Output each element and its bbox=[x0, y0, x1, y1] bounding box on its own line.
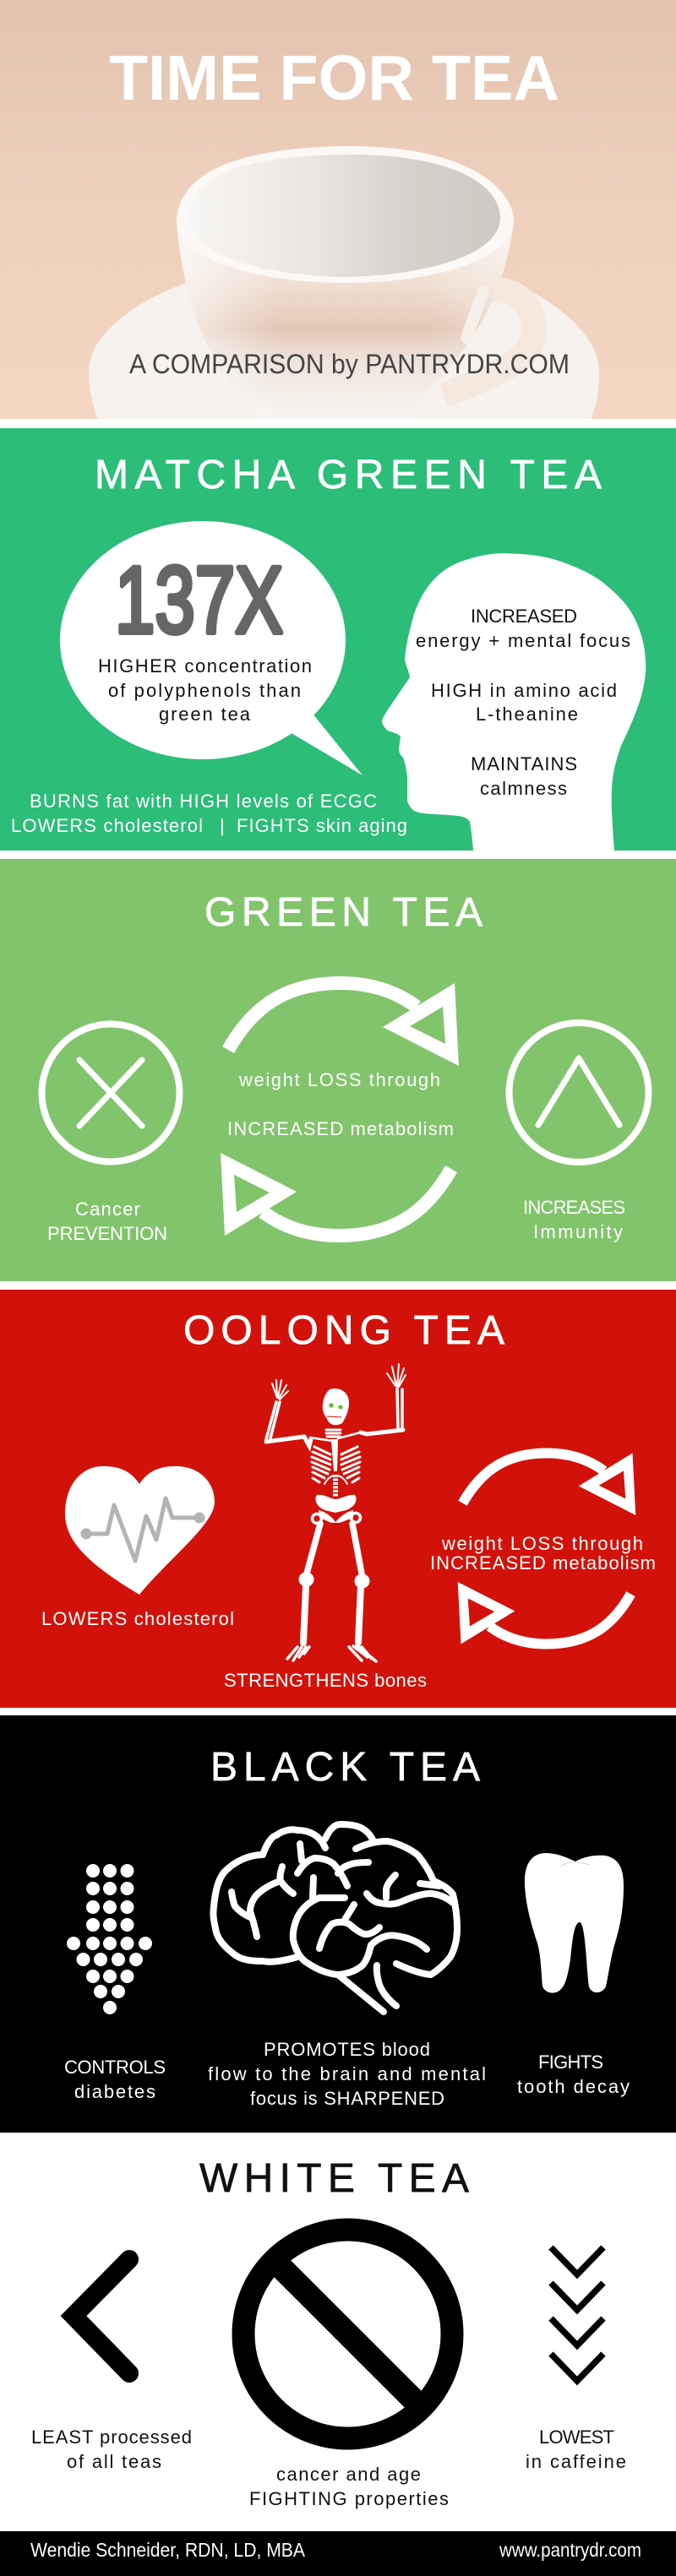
text: head benefits: L-theanine bbox=[476, 704, 578, 725]
text: head benefits: HIGH in amino acid bbox=[431, 680, 617, 701]
icon: brain bbox=[213, 1824, 457, 2012]
arrow: cycle top small bbox=[463, 1453, 635, 1515]
text: weight loss bbox=[227, 1069, 454, 1139]
subtitle: A COMPARISON by PANTRYDR.COM bbox=[129, 349, 570, 379]
text: increases immunity: Immunity bbox=[533, 1221, 623, 1242]
text: weight loss: weight LOSS through bbox=[238, 1069, 440, 1090]
text: matcha benefits bbox=[11, 791, 407, 836]
heading: oolong tea: OOLONG TEA bbox=[183, 1308, 504, 1353]
text: fights tooth decay: FIGHTS bbox=[538, 2052, 603, 2073]
text: author credit: Wendie Schneider, RDN, LD, MBA bbox=[30, 2539, 306, 2561]
text: promotes blood flow: focus is SHARPENED bbox=[250, 2088, 444, 2109]
text: head benefits: INCREASED bbox=[471, 606, 577, 627]
icon: tooth bbox=[525, 1853, 624, 1993]
text: strengthens bones: STRENGTHENS bones bbox=[224, 1670, 427, 1691]
icon: four down chevrons bbox=[551, 2247, 603, 2381]
text: cancer prevention bbox=[47, 1198, 167, 1244]
icon: caret in circle bbox=[509, 1023, 649, 1162]
text: promotes blood flow: PROMOTES blood bbox=[264, 2039, 430, 2060]
heading: white tea: WHITE TEA bbox=[199, 2156, 469, 2201]
icon: teacup on saucer bbox=[89, 146, 599, 422]
text: lowers cholesterol: LOWERS cholesterol bbox=[41, 1608, 234, 1629]
text: fighting properties: FIGHTING properties bbox=[249, 2488, 449, 2509]
text: cancer prevention: PREVENTION bbox=[47, 1223, 167, 1244]
text: controls diabetes bbox=[64, 2057, 166, 2102]
text: fighting properties bbox=[249, 2464, 449, 2509]
panel: oolong tea bbox=[0, 1290, 676, 1708]
text: matcha benefits: FIGHTS skin aging bbox=[237, 815, 407, 836]
text: least processed: LEAST processed bbox=[31, 2427, 192, 2448]
text: lowest caffeine: LOWEST bbox=[539, 2427, 614, 2448]
text: increases immunity: INCREASES bbox=[523, 1197, 625, 1218]
text: head benefits: MAINTAINS bbox=[471, 753, 577, 774]
panel: green tea bbox=[0, 859, 676, 1281]
icon: left chevron bbox=[74, 2259, 129, 2373]
text: lowest caffeine bbox=[526, 2427, 626, 2472]
speech bubble bbox=[60, 521, 363, 775]
text: fighting properties: cancer and age bbox=[276, 2464, 421, 2485]
text: fights tooth decay bbox=[517, 2052, 630, 2097]
text: cancer prevention: Cancer bbox=[75, 1198, 140, 1220]
text: least processed bbox=[31, 2427, 192, 2472]
panel: white tea bbox=[0, 2133, 676, 2531]
text: lowest caffeine: in caffeine bbox=[526, 2451, 626, 2472]
stat: 137X: 137X bbox=[115, 547, 283, 653]
title: TIME FOR TEA bbox=[109, 42, 559, 113]
text: weight loss: INCREASED metabolism bbox=[227, 1118, 454, 1139]
text: matcha benefits: BURNS fat with HIGH levels of ECGC bbox=[30, 791, 377, 812]
icon: dotted down arrow bbox=[67, 1864, 152, 2014]
text: promotes blood flow: flow to the brain and mental bbox=[208, 2063, 486, 2084]
text: weight loss: weight LOSS through bbox=[441, 1533, 643, 1554]
panel: footer bbox=[0, 2531, 676, 2576]
heading: black tea: BLACK TEA bbox=[210, 1745, 480, 1790]
text: controls diabetes: diabetes bbox=[74, 2081, 155, 2102]
text: least processed: of all teas bbox=[67, 2451, 161, 2472]
text: fights tooth decay: tooth decay bbox=[517, 2076, 630, 2097]
icon: head silhouette bbox=[382, 553, 646, 851]
text: polyphenols: HIGHER concentration bbox=[98, 655, 312, 677]
arrow: cycle bottom small bbox=[458, 1582, 630, 1644]
panel: matcha green tea bbox=[0, 428, 676, 851]
heading: green tea: GREEN TEA bbox=[204, 890, 482, 935]
text: head benefits: energy + mental focus bbox=[416, 630, 630, 651]
panel: black tea bbox=[0, 1715, 676, 2133]
text: controls diabetes: CONTROLS bbox=[64, 2057, 166, 2078]
heading: matcha green tea: MATCHA GREEN TEA bbox=[95, 453, 602, 497]
text: polyphenols: of polyphenols than bbox=[108, 680, 301, 701]
arrow: cycle top bbox=[228, 983, 459, 1066]
text: weight loss bbox=[430, 1533, 656, 1573]
text: head benefits bbox=[416, 606, 630, 799]
text: polyphenols: green tea bbox=[159, 704, 251, 725]
text: matcha benefits: | bbox=[220, 815, 225, 836]
text: polyphenols bbox=[98, 655, 312, 725]
panel: hero header bbox=[0, 0, 676, 422]
text: head benefits: calmness bbox=[480, 778, 567, 799]
text: promotes blood flow bbox=[208, 2039, 486, 2109]
icon: heart with pulse bbox=[65, 1466, 215, 1595]
text: weight loss: INCREASED metabolism bbox=[430, 1552, 656, 1573]
icon: X in circle bbox=[42, 1024, 179, 1162]
text: matcha benefits: LOWERS cholesterol bbox=[11, 815, 203, 836]
icon: skeleton bbox=[266, 1364, 406, 1661]
text: website: www.pantrydr.com bbox=[499, 2539, 641, 2561]
text: increases immunity bbox=[523, 1197, 625, 1242]
icon: prohibition sign bbox=[243, 2230, 452, 2438]
arrow: cycle bottom bbox=[221, 1153, 451, 1236]
